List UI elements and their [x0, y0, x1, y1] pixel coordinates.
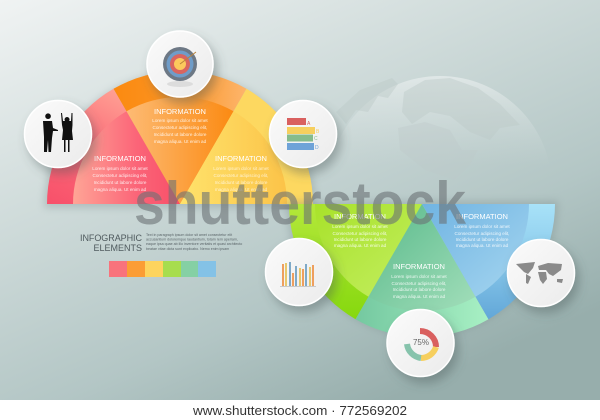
icon: target disc	[147, 31, 213, 97]
icon: donut chart disc	[387, 310, 454, 376]
heading: infographic elements	[80, 233, 142, 253]
color strip	[109, 261, 216, 277]
text: information green	[332, 212, 388, 248]
segment: yellow outer	[180, 89, 313, 204]
segment: orange outer	[114, 71, 246, 204]
icon: stacked bars disc: C	[314, 136, 318, 142]
icon: stacked bars disc: D	[315, 145, 319, 151]
footer text: www.shutterstock.com · 772569202	[192, 403, 407, 418]
icon: donut chart disc: 75%	[413, 338, 429, 347]
text: information yellow: Incididunt ut labore dolore	[215, 180, 268, 185]
text: information teal: Consectetur adipiscing elit,	[392, 281, 446, 286]
text: information yellow	[213, 154, 269, 192]
text: information green: magna aliqua. Ut enim ad	[334, 243, 387, 248]
panel: upper semicircle	[44, 71, 316, 208]
text: information green: Consectetur adipiscing elit,	[333, 231, 387, 236]
panel: lower semicircle	[286, 201, 558, 337]
text: information orange: Consectetur adipiscing elit,	[153, 125, 207, 130]
text: information red: Lorem ipsum dolor sit amet	[92, 166, 148, 171]
shadow	[44, 72, 316, 208]
segment: blue outer	[422, 204, 555, 319]
segment: blue inner	[422, 204, 529, 297]
text block: description	[146, 233, 242, 251]
text block: description: beatae vitae dicta sunt explicabo. Nemo enim ipsam	[146, 247, 229, 251]
text: information teal: Incididunt ut labore dolore	[393, 287, 446, 292]
segment: teal inner	[368, 204, 476, 311]
text: information yellow: INFORMATION	[215, 154, 267, 163]
text: information green: INFORMATION	[334, 212, 386, 221]
text: information orange: Incididunt ut labore dolore	[154, 132, 207, 137]
text block: description: Text in paragraph ipsum dolor sit amet consectetur elit	[146, 233, 232, 237]
shadow	[286, 201, 558, 337]
heading: infographic elements: ELEMENTS	[93, 243, 142, 253]
segment: yellow inner	[180, 111, 287, 204]
segment: teal outer	[356, 204, 488, 337]
text: information teal: INFORMATION	[393, 262, 445, 271]
footer strip	[0, 400, 600, 420]
text: information orange	[152, 107, 208, 144]
shutterstock watermark: shutterstock	[134, 170, 467, 237]
segment: green outer	[289, 204, 422, 319]
segment: red outer	[47, 89, 180, 204]
text: information teal: magna aliqua. Ut enim ad	[393, 294, 446, 299]
heading: infographic elements: INFOGRAPHIC	[80, 233, 142, 243]
icon: stacked bars disc	[270, 100, 336, 168]
text: information yellow: magna aliqua. Ut enim ad	[215, 187, 268, 192]
text block: description: accusantium doloremque laudantium, totam rem aperiam,	[146, 238, 238, 242]
globe watermark	[328, 76, 552, 188]
text: information orange: Lorem ipsum dolor sit amet	[152, 118, 208, 123]
icon: stacked bars disc: A	[307, 121, 311, 127]
icon: business people disc	[24, 100, 92, 168]
text: information blue: Lorem ipsum dolor sit amet	[454, 224, 510, 229]
segment: red inner	[73, 111, 180, 204]
text: information red: Consectetur adipiscing elit,	[93, 173, 147, 178]
text: information red	[92, 154, 148, 192]
text: information orange: INFORMATION	[154, 107, 206, 116]
text: information red: Incididunt ut labore dolore	[94, 180, 147, 185]
segment: orange inner	[126, 97, 234, 204]
text: information blue: INFORMATION	[456, 212, 508, 221]
text: information yellow: Consectetur adipiscing elit,	[214, 173, 268, 178]
text: information teal	[391, 262, 447, 299]
text: information blue: magna aliqua. Ut enim ad	[456, 243, 509, 248]
text: information blue	[454, 212, 510, 248]
text block: description: eaque ipsa quae ab illo inventore veritatis et quasi architecto	[146, 242, 242, 246]
text: information yellow: Lorem ipsum dolor sit amet	[213, 166, 269, 171]
text: information green: Lorem ipsum dolor sit amet	[332, 224, 388, 229]
text: information green: Incididunt ut labore dolore	[334, 237, 387, 242]
icon: stacked bars disc: B	[316, 129, 320, 135]
text: information teal: Lorem ipsum dolor sit amet	[391, 274, 447, 279]
text: information red: INFORMATION	[94, 154, 146, 163]
text: information blue: Incididunt ut labore dolore	[456, 237, 509, 242]
text: information red: magna aliqua. Ut enim ad	[94, 187, 147, 192]
icon: world map disc	[508, 240, 574, 306]
text: information blue: Consectetur adipiscing elit,	[455, 231, 509, 236]
segment: green inner	[315, 204, 422, 297]
icon: bar chart disc	[266, 238, 332, 306]
text: information orange: magna aliqua. Ut enim ad	[154, 139, 207, 144]
